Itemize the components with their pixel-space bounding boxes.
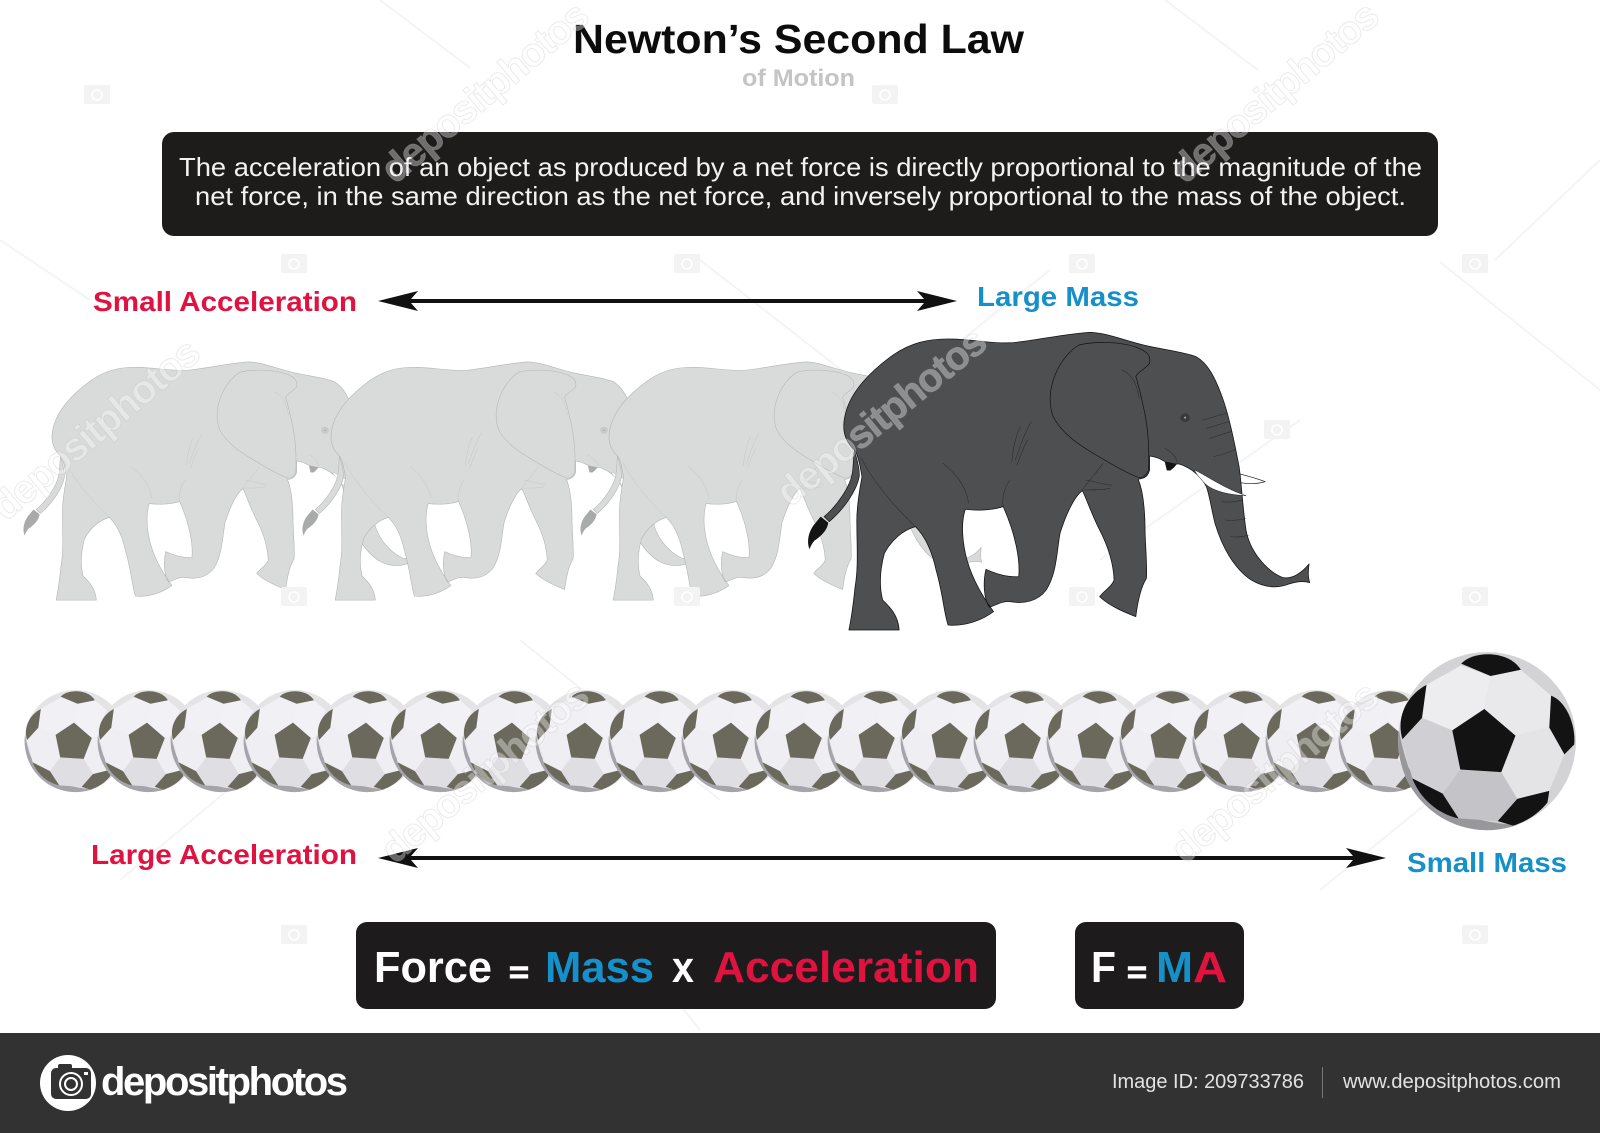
definition box — [162, 132, 1438, 236]
title: Newton’s Second Law — [573, 16, 1024, 62]
formula box: force = mass x acceleration: Acceleration — [713, 943, 979, 992]
watermarks: depositphotos — [1163, 673, 1388, 872]
icon: camera logo — [40, 1055, 96, 1111]
arrow: bottom double-headed — [378, 848, 1386, 868]
label: small acceleration: Small Acceleration — [93, 286, 357, 317]
formula box: force = mass x acceleration — [356, 922, 996, 1009]
label: small mass: Small Mass — [1407, 847, 1567, 878]
formula box: force = mass x acceleration: x — [672, 943, 694, 992]
formula box: F = MA: = — [1127, 956, 1147, 989]
formula box: F = MA — [1075, 922, 1244, 1009]
formula box: F = MA: M — [1156, 943, 1193, 992]
formula box: F = MA: F — [1091, 943, 1116, 992]
watermarks — [0, 0, 1488, 944]
watermarks: depositphotos — [373, 673, 598, 872]
watermarks: depositphotos — [768, 319, 995, 515]
definition box: net force, in the same direction as the net force, and inversely proportional to the mass of the object. — [195, 181, 1406, 211]
website url: www.depositphotos.com — [1342, 1071, 1561, 1093]
image id: Image ID: 209733786 — [1112, 1071, 1304, 1093]
label: large acceleration: Large Acceleration — [91, 839, 357, 870]
elephant ghost 1 — [23, 362, 425, 600]
formula box: F = MA: A — [1193, 943, 1227, 992]
small soccer balls row — [24, 690, 1440, 792]
elephant ghost 2 — [302, 362, 704, 600]
formula box: force = mass x acceleration: Mass — [545, 943, 654, 992]
elephant ghost 3 — [580, 362, 982, 600]
subtitle: of Motion — [742, 65, 855, 92]
footer bar — [0, 1033, 1600, 1133]
large soccer ball — [1398, 652, 1576, 830]
formula box: force = mass x acceleration: = — [509, 956, 529, 989]
elephant: main dark — [808, 332, 1310, 630]
logo wordmark: depositphotos — [101, 1060, 348, 1104]
formula box: force = mass x acceleration: Force — [374, 943, 492, 992]
label: large mass: Large Mass — [977, 281, 1139, 312]
definition box: The acceleration of an object as produced by a net force is directly proportional to the magnitude of the — [179, 152, 1422, 182]
arrow: top double-headed — [378, 291, 957, 311]
